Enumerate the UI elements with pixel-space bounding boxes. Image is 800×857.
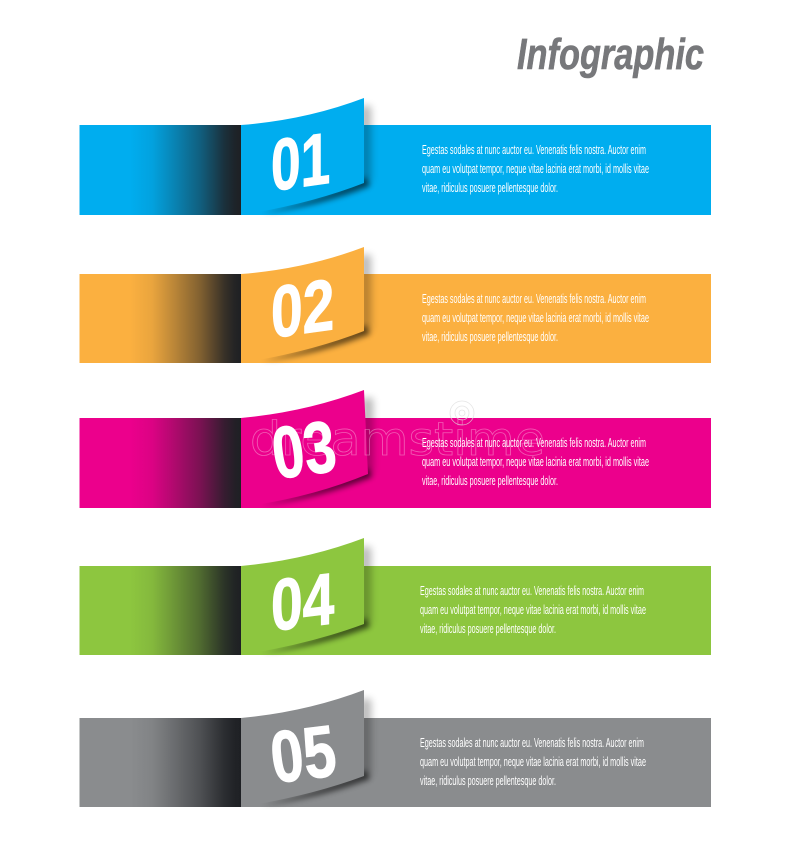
flag [241, 98, 364, 215]
panel: banner 04 [80, 538, 711, 655]
flag [241, 247, 364, 363]
description text: vitae, ridiculus posuere pellentesque dolor. [420, 621, 556, 636]
fold gradient [130, 418, 241, 508]
title: Infographic [517, 30, 704, 79]
fold gradient [130, 274, 241, 363]
flag shadow [262, 398, 373, 505]
panel: banner 05 [80, 690, 711, 807]
bar: green band [80, 566, 711, 655]
bar: magenta band [80, 418, 711, 508]
bar: orange band [80, 274, 711, 363]
number 02: 02 [271, 264, 334, 354]
panel: banner 01 [80, 98, 711, 215]
flag shadow [262, 255, 371, 361]
description text: vitae, ridiculus posuere pellentesque dolor. [422, 473, 558, 488]
fold gradient [130, 125, 241, 215]
flag [241, 690, 364, 807]
flag [241, 538, 364, 655]
panel: banner 03 [80, 390, 711, 508]
panel: banner 02 [80, 247, 711, 363]
flag shadow [262, 106, 371, 213]
description text: vitae, ridiculus posuere pellentesque dolor. [422, 329, 558, 344]
bar: grey band [80, 718, 711, 807]
description text: vitae, ridiculus posuere pellentesque dolor. [420, 773, 556, 788]
number 01: 01 [271, 117, 330, 207]
fold gradient [130, 718, 241, 807]
flag shadow [262, 547, 371, 653]
description text: vitae, ridiculus posuere pellentesque dolor. [422, 180, 558, 195]
number 03: 03 [267, 405, 341, 494]
number 04: 04 [271, 558, 335, 647]
flag [241, 390, 368, 507]
number 05: 05 [266, 710, 340, 799]
flag shadow [262, 699, 371, 805]
fold gradient [130, 566, 241, 655]
bar: blue band [80, 125, 711, 215]
watermark: dreamstime [250, 412, 545, 466]
